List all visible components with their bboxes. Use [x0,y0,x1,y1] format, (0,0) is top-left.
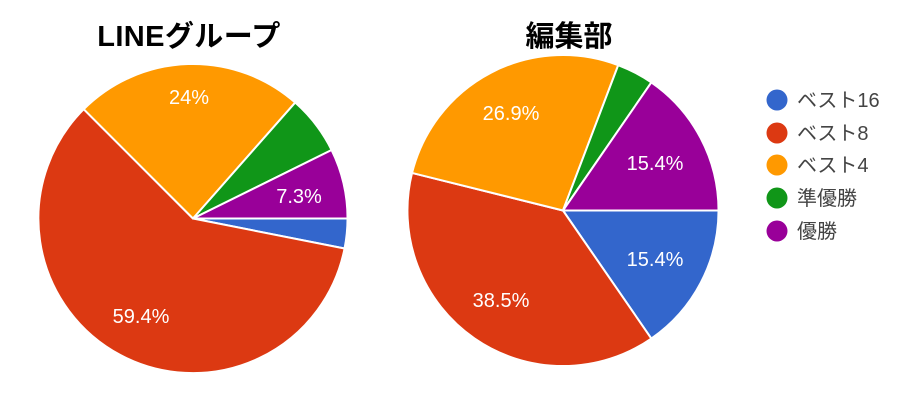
slice: 優勝 [563,82,719,210]
pie chart: 編集部 [407,55,719,366]
legend item: ベスト8: ベスト8 [797,123,869,145]
slice: ベスト8 [38,109,345,373]
pie labels: 編集部 [473,103,684,312]
legend [766,90,880,243]
slice: ベスト4 [412,55,618,210]
slice: ベスト4 [84,64,295,219]
legend item: ベスト4: ベスト4 [797,155,869,177]
legend item: ベスト4 [766,154,869,177]
label: 24%: 24% [169,87,209,109]
title: LINEグループ: LINEグループ [97,20,281,53]
legend item: ベスト8 [766,122,869,145]
title: 編集部: 編集部 [525,20,613,53]
legend item: 優勝 [766,220,837,243]
legend item: 優勝: 優勝 [797,220,837,243]
label: 59.4%: 59.4% [113,306,170,328]
slice: ベスト8 [407,173,651,366]
label: 15.4% purple: 15.4% [627,153,684,175]
legend item: 準優勝 [766,187,857,210]
label: 26.9%: 26.9% [483,103,540,125]
pie labels: LINEグループ [113,87,322,328]
slice: 準優勝 [193,103,332,218]
slice: ベスト16 [563,210,719,339]
legend item: ベスト16: ベスト16 [797,90,880,112]
label: 15.4% blue: 15.4% [627,249,684,271]
slice: ベスト16 [193,218,348,249]
pie chart: LINEグループ [38,64,348,373]
label: 7.3%: 7.3% [276,186,322,208]
slice: 優勝 [193,150,348,218]
label: 38.5%: 38.5% [473,290,530,312]
slice: 準優勝 [563,65,651,210]
legend item: 準優勝: 準優勝 [797,187,857,210]
